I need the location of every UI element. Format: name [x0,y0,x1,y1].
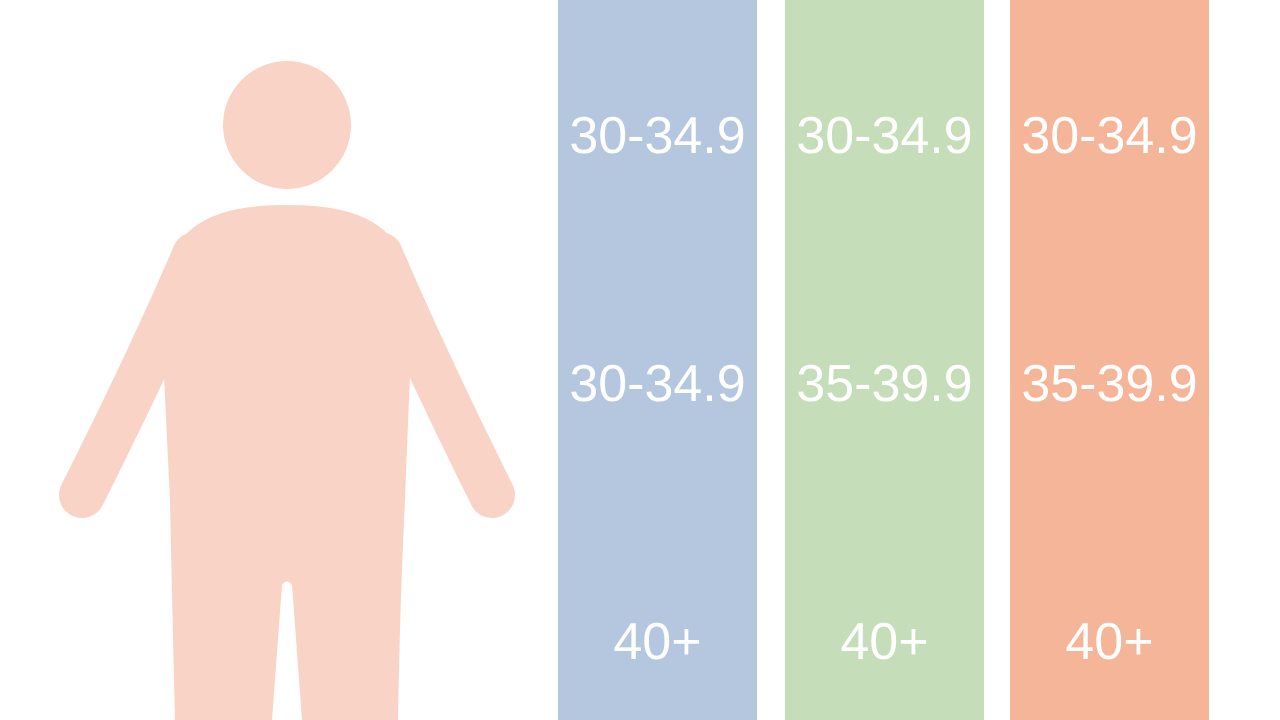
column: green: 30-34.9 [796,107,973,165]
column: blue: 30-34.9 [569,355,746,413]
column: orange [1010,0,1209,720]
column: orange: 40+ [1065,613,1154,671]
column: green [785,0,984,720]
head [223,61,351,189]
arms [82,255,492,495]
icon: person silhouette [59,61,515,720]
column: green: 40+ [840,613,929,671]
column: blue: 40+ [613,613,702,671]
column: orange: 30-34.9 [1021,107,1198,165]
column: blue [558,0,757,720]
column: green: 35-39.9 [796,355,973,413]
column: orange: 35-39.9 [1021,355,1198,413]
column: blue: 30-34.9 [569,107,746,165]
torso and legs [162,205,412,720]
